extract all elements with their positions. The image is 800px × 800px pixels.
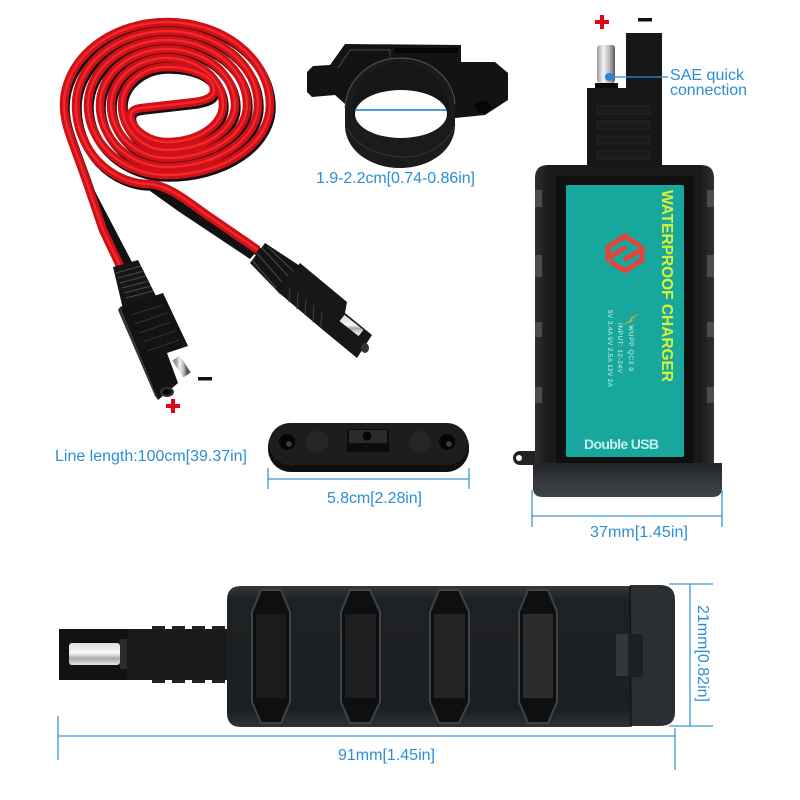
strap slot 3 xyxy=(430,590,469,723)
minus sign, left connector xyxy=(198,377,212,380)
mounting plate xyxy=(268,423,469,472)
main body xyxy=(227,586,630,727)
callout: SAE quick connection: SAE quick xyxy=(670,67,745,84)
plus sign, left connector xyxy=(166,399,180,413)
left SAE connector xyxy=(113,260,188,400)
charger side view xyxy=(59,585,675,727)
waterproof charger, front view xyxy=(513,165,722,497)
lightning icon xyxy=(621,313,640,326)
callout: SAE quick connection xyxy=(605,67,747,99)
SAE plug on charger xyxy=(587,33,662,165)
teal label: 5V 3.4A 9V 2.5A 12V 2A xyxy=(606,310,613,388)
label heading: WATERPROOF CHARGER xyxy=(658,190,675,382)
inner diameter arrow xyxy=(355,109,446,111)
end cap xyxy=(630,585,675,726)
mount tab xyxy=(513,451,535,465)
right SAE connector xyxy=(250,243,372,358)
dimension: charger height xyxy=(669,584,713,726)
dimension: charger height: 21mm[0.82in] xyxy=(694,605,711,702)
dimension: plate width: 5.8cm[2.28in] xyxy=(327,490,422,507)
dimension: charger length: 91mm[1.45in] xyxy=(338,747,435,764)
strap slot 2 xyxy=(341,590,380,723)
strap slot 1 xyxy=(252,590,290,723)
logo xyxy=(608,236,642,271)
Double USB: Double USB xyxy=(584,436,659,452)
callout: SAE quick connection: connection xyxy=(670,82,747,99)
cap tab xyxy=(613,634,643,677)
dimension: charger width xyxy=(532,490,722,541)
mounting clip xyxy=(307,44,508,168)
minus sign, charger xyxy=(638,18,652,22)
teal label: INPUT: 12-24V xyxy=(616,323,623,374)
text: clip diameter: 1.9-2.2cm[0.74-0.86in] xyxy=(316,170,475,187)
dimension: charger width: 37mm[1.45in] xyxy=(590,524,688,541)
red and black coiled cable xyxy=(64,22,272,272)
dimension: plate width xyxy=(268,468,469,507)
text: line length: Line length:100cm[39.37in] xyxy=(55,448,247,465)
plus sign, charger xyxy=(595,15,609,29)
end cap xyxy=(533,463,722,497)
spec lines: WUPP QC3.0 xyxy=(627,325,634,371)
charger body xyxy=(535,165,714,480)
dimension: charger length xyxy=(58,716,675,770)
plug tip with pin xyxy=(59,629,127,680)
strap slot 4 xyxy=(519,590,557,723)
teal label xyxy=(566,185,684,457)
